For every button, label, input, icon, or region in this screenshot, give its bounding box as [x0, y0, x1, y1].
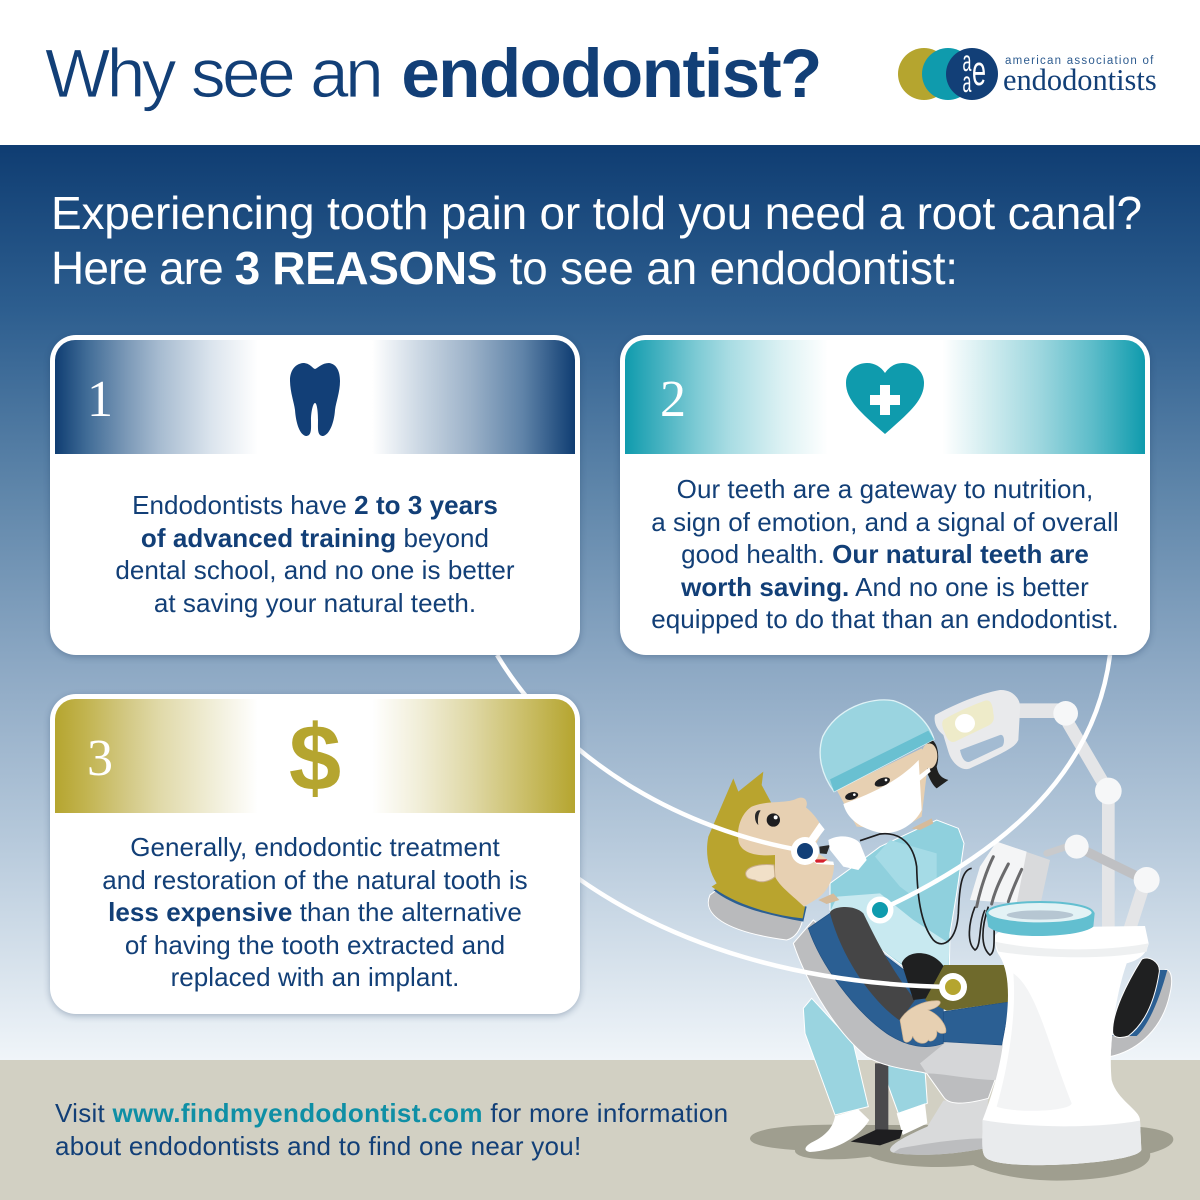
chair seat: [808, 913, 1010, 1047]
panel 2 text: equipped to do that than an endodontist.: [651, 604, 1119, 634]
panel 3 text: [102, 832, 528, 992]
number 2: 2: [660, 371, 686, 428]
footer text: about endodontists and to find one near you!: [55, 1130, 582, 1160]
panel: reason 2: [620, 335, 1150, 655]
intro heading: Experiencing tooth pain or told you need a root canal?: [51, 187, 1142, 239]
lamp head: [935, 690, 1020, 769]
blue gradient background: [0, 145, 1200, 1060]
logo circles: [898, 45, 998, 100]
spittoon unit: [982, 926, 1149, 1165]
panel 2 text: [651, 474, 1119, 634]
panel 1 text: at saving your natural teeth.: [154, 588, 476, 618]
dentist shoes: [805, 1103, 927, 1152]
patient hand: [900, 1001, 946, 1043]
panel 1 text: [115, 490, 515, 618]
floor shadow: [750, 1125, 1173, 1181]
dentist legs: [803, 998, 927, 1115]
callout dot 3: [939, 973, 967, 1001]
panel 3 text: Generally, endodontic treatment: [130, 832, 500, 862]
icon: tooth: [290, 363, 340, 436]
callout dot 1: [791, 837, 819, 865]
patient clothing: [830, 907, 1010, 1021]
basin: [986, 902, 1095, 936]
panel 3 header band: [55, 699, 575, 813]
panel 3 text: less expensive than the alternative: [108, 897, 522, 927]
panel 3 text: of having the tooth extracted and: [125, 930, 505, 960]
panel 1 header band: [55, 340, 575, 454]
patient hair: [707, 772, 805, 918]
headrest: [708, 888, 807, 940]
dentist glove: [828, 836, 867, 870]
logo wordmark: endodontists: [1003, 63, 1157, 97]
panel 2 text: a sign of emotion, and a signal of overall: [651, 506, 1119, 536]
logo circles: a: [963, 45, 972, 78]
panel 2 text: good health. Our natural teeth are: [681, 539, 1089, 569]
dentist torso: [830, 820, 964, 967]
panel 1 text: dental school, and no one is better: [115, 555, 515, 585]
title: Why see an endodontist?: [45, 35, 821, 112]
number 1: 1: [87, 371, 113, 428]
dentist cap: [820, 700, 934, 792]
number 3: 3: [87, 730, 113, 787]
footer text: Visit www.findmyendodontist.com for more information: [55, 1098, 728, 1128]
panel 2 text: worth saving. And no one is better: [681, 572, 1089, 602]
panel 2 text: Our teeth are a gateway to nutrition,: [677, 474, 1093, 504]
panel 2 header band: [625, 340, 1145, 454]
logo: american association of endodontists: [898, 45, 1157, 100]
unit foot rest: [1110, 958, 1172, 1057]
drill hose: [860, 834, 972, 944]
panel 3 text: replaced with an implant.: [171, 962, 459, 992]
chair body: [793, 920, 1008, 1155]
panel: reason 3: [50, 694, 580, 1014]
logo circles: e: [972, 49, 986, 95]
logo circles: a: [963, 66, 972, 99]
footer text: [55, 1098, 728, 1160]
callout lines: [497, 655, 1110, 987]
panel 1 text: of advanced training beyond: [141, 522, 489, 552]
floor band: [0, 1060, 1200, 1200]
panel 1 text: Endodontists have 2 to 3 years: [132, 490, 498, 520]
icon: heart with plus: [846, 363, 924, 434]
dental tool holder: [969, 842, 1050, 955]
intro heading: [51, 187, 1142, 294]
arm joints: [1053, 701, 1160, 893]
panel: reason 1: [50, 335, 580, 655]
lamp arm: [1020, 711, 1145, 928]
icon: dollar sign: $: [289, 705, 341, 810]
patient face: [738, 798, 839, 907]
logo small text: american association of: [1005, 55, 1155, 67]
intro heading: Here are 3 REASONS to see an endodontist:: [51, 242, 958, 294]
stool: [851, 1063, 903, 1145]
panel 3 text: and restoration of the natural tooth is: [102, 864, 528, 894]
callout dot 2: [866, 896, 894, 924]
dentist head: [837, 738, 948, 833]
